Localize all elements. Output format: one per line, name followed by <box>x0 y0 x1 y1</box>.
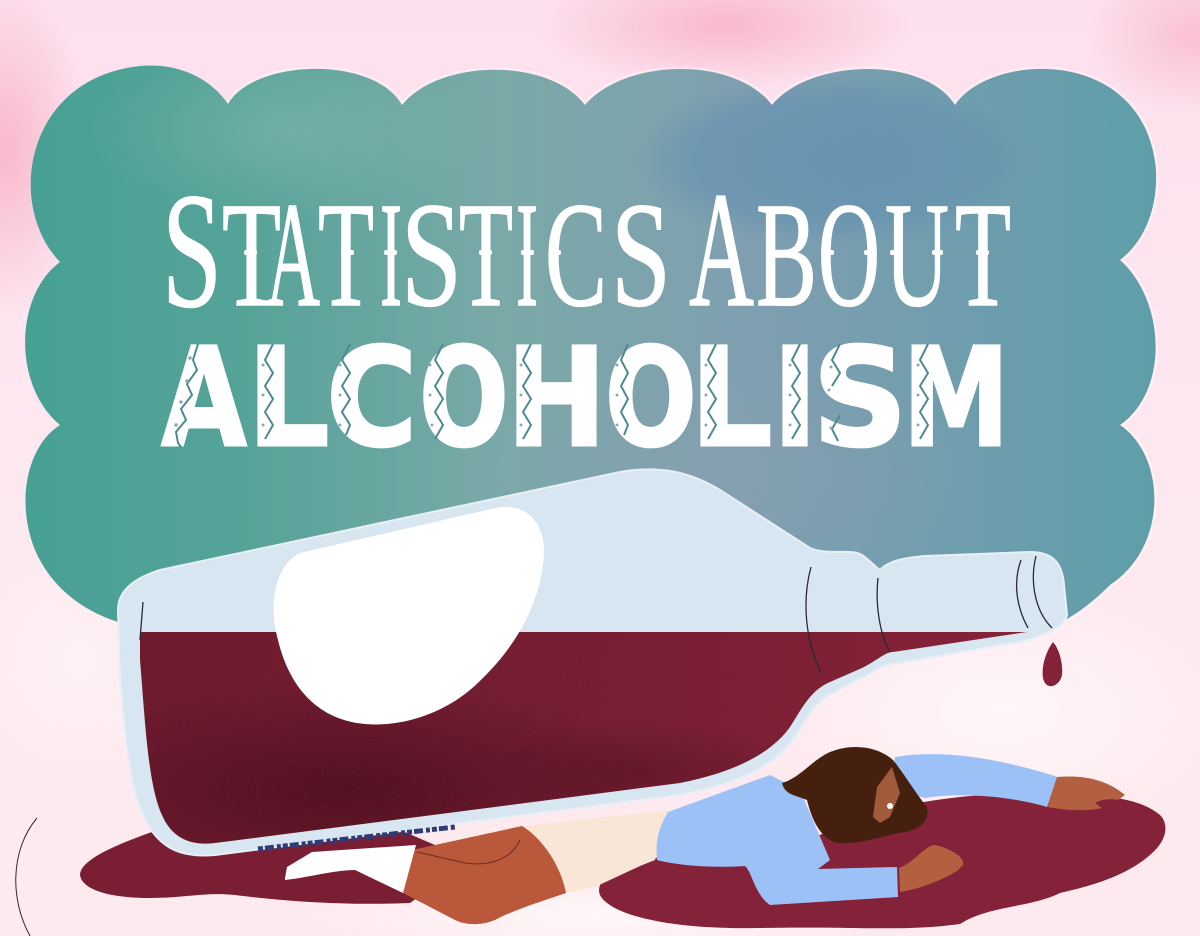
title: Statistics About: U <box>885 172 949 338</box>
legs: cream skin <box>525 810 670 893</box>
title: Alcoholism: S <box>812 320 908 478</box>
title: Statistics About: A <box>689 158 754 341</box>
crease line <box>417 840 520 864</box>
puddle: right wine spill <box>599 793 1165 928</box>
title: Alcoholism <box>162 320 1009 478</box>
title: Statistics About: C <box>545 172 607 338</box>
title: Alcoholism: I <box>773 320 817 478</box>
figure: person under the bottle <box>285 747 1125 924</box>
bottle: white highlight <box>274 507 544 724</box>
hand: right arm <box>1047 776 1125 810</box>
title: Statistics About: I <box>516 172 538 338</box>
skirt: orange shorts <box>403 826 566 924</box>
tear <box>887 803 893 809</box>
sock: white <box>285 845 416 893</box>
decorative arc: bottom-left line <box>16 818 37 936</box>
title: Alcoholism: O <box>605 320 697 478</box>
title: Statistics About: T <box>955 172 1011 338</box>
bottle: wine inside <box>140 632 1027 844</box>
cloud panel: scalloped teal backdrop <box>25 66 1156 622</box>
wine drop <box>1043 642 1062 686</box>
title: Statistics About: S <box>162 159 222 342</box>
hair <box>782 747 927 843</box>
bottle: glass body <box>118 469 1067 856</box>
title: Statistics About: T <box>459 172 513 338</box>
bottle: neck and rim contour lines <box>140 556 1052 673</box>
body: blue top <box>657 775 898 905</box>
title: Alcoholism: O <box>419 320 509 478</box>
face <box>873 767 900 823</box>
puddle: left wine spill <box>80 830 470 904</box>
title: Alcoholism: H <box>507 320 606 478</box>
title: Statistics About <box>162 158 1011 342</box>
title: Statistics About: S <box>401 172 462 338</box>
title: Alcoholism: C <box>326 320 417 478</box>
title: Statistics About: T <box>222 172 281 338</box>
hand: lower arm <box>899 845 963 892</box>
title: Alcoholism: A <box>162 320 246 478</box>
title: Statistics About: S <box>611 172 671 338</box>
title: Statistics About: T <box>318 172 374 338</box>
title: Statistics About: I <box>380 172 402 338</box>
title: Alcoholism: L <box>690 320 772 478</box>
title: Statistics About: A <box>266 172 320 338</box>
title: Alcoholism: L <box>247 320 329 478</box>
title: Alcoholism: M <box>903 320 1009 478</box>
title: Statistics About: O <box>818 172 880 338</box>
arm: extended blue sleeve <box>890 754 1058 807</box>
title: Statistics About: B <box>756 172 817 338</box>
label strip: tiny text on bottle edge <box>258 827 455 849</box>
